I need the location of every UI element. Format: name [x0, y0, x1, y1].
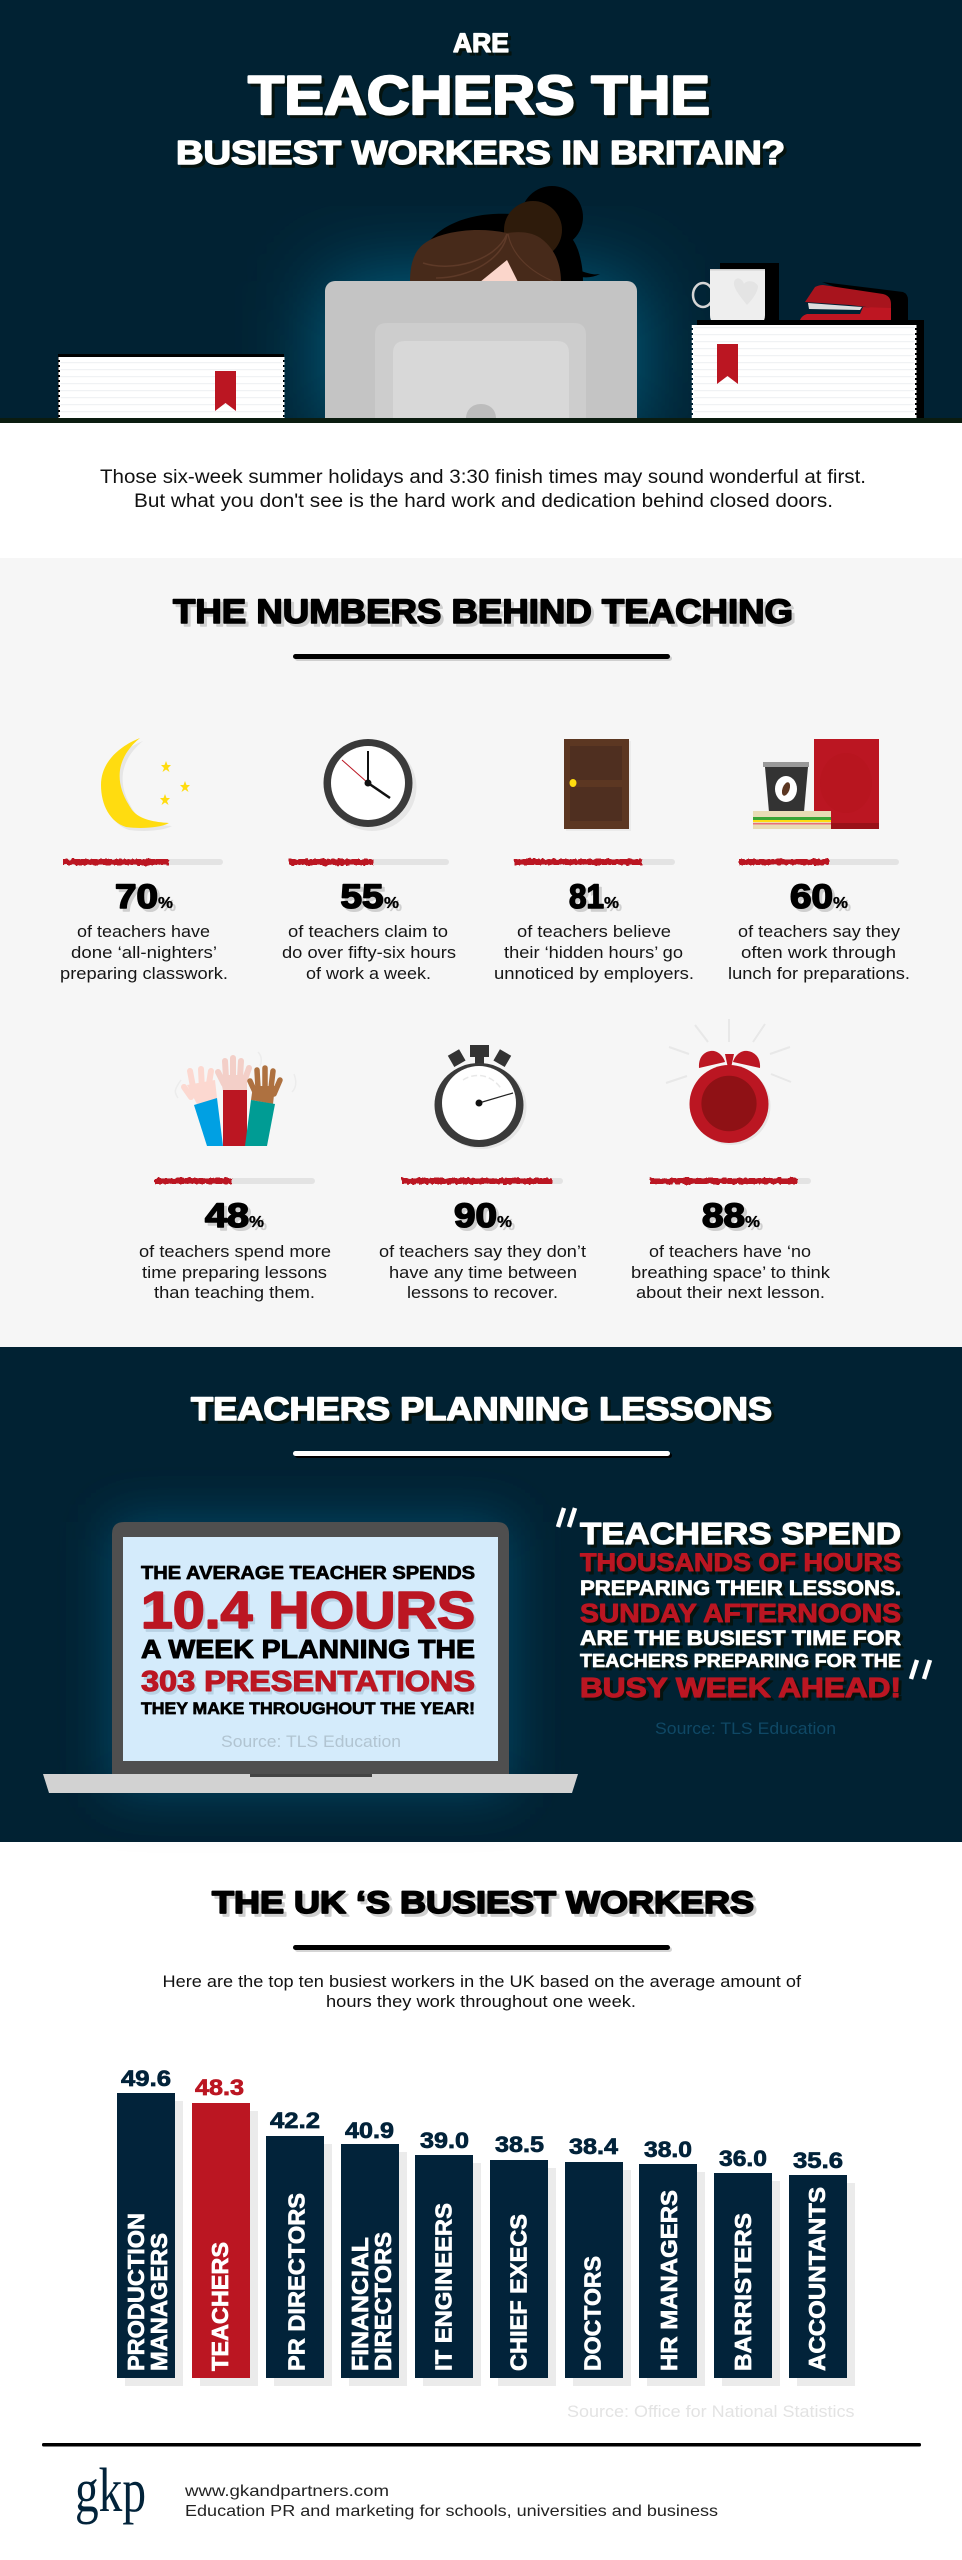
stat: 60% lunch: %	[833, 895, 848, 912]
chart intro text	[162, 1972, 801, 2011]
heading: planning: TEACHERS PLANNING LESSONS	[191, 1391, 772, 1427]
stat: 90% no recovery time: lessons to recover.	[407, 1283, 558, 1302]
bar: barristers	[714, 2146, 780, 2386]
bar: accountants	[789, 2148, 855, 2386]
quote: THOUSANDS OF HOURS	[580, 1549, 901, 1577]
quote: ARE THE BUSIEST TIME FOR	[580, 1627, 901, 1650]
bar chart	[117, 2066, 855, 2386]
chart source: Source: Office for National Statistics	[567, 2402, 854, 2421]
title	[176, 28, 785, 171]
bar: accountants: ACCOUNTANTS	[804, 2187, 830, 2371]
bar: financial directors: 40.9	[345, 2118, 394, 2143]
bar: teachers: 48.3	[195, 2075, 244, 2100]
stat: 55% fifty-six hours: %	[384, 895, 399, 912]
logo: gkp	[75, 2457, 146, 2525]
intro text: But what you don't see is the hard work and dedication behind closed doors.	[134, 491, 833, 512]
stat: 88% no breathing space: about their next lesson.	[636, 1283, 825, 1302]
bar: barristers: BARRISTERS	[730, 2213, 756, 2371]
stat: 48% preparing lessons: of teachers spend more	[139, 1242, 331, 1261]
heading: the UK's busiest workers: THE UK ‘S BUSIEST WORKERS	[212, 1884, 754, 1920]
footer text	[184, 2483, 718, 2520]
bar: IT engineers	[415, 2128, 481, 2386]
bar: PR directors	[266, 2108, 332, 2386]
stat: 90% no recovery time: %	[497, 1214, 512, 1231]
bar: IT engineers: 39.0	[420, 2128, 469, 2153]
stat: 81% hidden hours: %	[604, 895, 619, 912]
icon: closing quote mark	[911, 1660, 930, 1679]
stat: 81% hidden hours: unnoticed by employers.	[494, 964, 694, 983]
bar: financial directors	[341, 2118, 407, 2386]
footer text: www.gkandpartners.com	[184, 2483, 389, 2500]
chart intro text: Here are the top ten busiest workers in the UK based on the average amount of	[162, 1972, 801, 1991]
panel: teachers planning lessons	[0, 1347, 962, 1842]
stat: 55% fifty-six hours: do over fifty-six hours	[282, 943, 456, 962]
bar: financial directors: FINANCIAL	[347, 2237, 373, 2371]
bar: barristers: 36.0	[719, 2146, 767, 2171]
quote	[558, 1508, 930, 1703]
laptop	[43, 1522, 578, 1793]
stat: 70% all-nighters: 70	[115, 878, 158, 916]
laptop screen text: 303 PRESENTATIONS	[141, 1666, 475, 1698]
stat: 48% preparing lessons: time preparing lessons	[142, 1263, 327, 1282]
icon: ringing alarm clock	[666, 1019, 791, 1145]
bar: doctors	[565, 2134, 631, 2386]
stat: 90% no recovery time: of teachers say they don’t	[379, 1242, 586, 1261]
stat: 90% no recovery time: 90	[454, 1197, 497, 1235]
stat: 88% no breathing space: %	[745, 1214, 760, 1231]
bar: doctors: 38.4	[569, 2134, 619, 2159]
bar: PR directors: PR DIRECTORS	[284, 2193, 310, 2371]
quote: SUNDAY AFTERNOONS	[580, 1598, 901, 1628]
stat: 88% no breathing space: of teachers have ‘no	[649, 1242, 811, 1261]
laptop screen text: A WEEK PLANNING THE	[141, 1636, 475, 1664]
icon: right paper stack	[693, 320, 924, 418]
stat: 70% all-nighters: of teachers have	[77, 922, 210, 941]
bar: HR managers	[639, 2137, 705, 2386]
laptop screen text	[141, 1563, 475, 1751]
bar: accountants: 35.6	[793, 2148, 843, 2173]
stat: 70% all-nighters	[60, 738, 228, 983]
bar: teachers	[192, 2075, 258, 2386]
stat: 81% hidden hours: of teachers believe	[517, 922, 671, 941]
quote: TEACHERS SPEND	[580, 1517, 901, 1551]
heading: numbers: THE NUMBERS BEHIND TEACHING	[173, 593, 793, 631]
bar: IT engineers: IT ENGINEERS	[430, 2203, 456, 2371]
bar: doctors: DOCTORS	[579, 2256, 605, 2371]
bar: teachers: TEACHERS	[207, 2242, 233, 2371]
stat: 70% all-nighters: preparing classwork.	[60, 964, 228, 983]
title: ARE	[453, 28, 509, 58]
bar: production managers: 49.6	[121, 2066, 171, 2091]
footer text: Education PR and marketing for schools, universities and business	[185, 2503, 718, 2520]
stat: 88% no breathing space: 88	[702, 1197, 745, 1235]
stat: 55% fifty-six hours	[282, 739, 456, 983]
stat: 60% lunch: 60	[790, 878, 833, 916]
icon: monitor back	[325, 281, 637, 419]
bar: production managers: MANAGERS	[146, 2233, 172, 2371]
title: TEACHERS THE	[248, 64, 710, 126]
stat: 48% preparing lessons: than teaching them.	[154, 1283, 315, 1302]
stat: 60% lunch: lunch for preparations.	[728, 964, 910, 983]
quote: PREPARING THEIR LESSONS.	[580, 1577, 901, 1600]
stat: 81% hidden hours: their ‘hidden hours’ go	[504, 943, 683, 962]
icon: left bookmark	[215, 371, 236, 411]
panel: header illustration	[0, 0, 962, 431]
laptop screen text: THE AVERAGE TEACHER SPENDS	[141, 1563, 475, 1583]
icon: stapler	[799, 282, 908, 325]
bar: chief execs: CHIEF EXECS	[505, 2214, 531, 2371]
icon: mug	[693, 263, 779, 325]
bar: HR managers: HR MANAGERS	[656, 2190, 682, 2371]
stat: 90% no recovery time: have any time between	[389, 1263, 577, 1282]
icon: teacher hair behind monitor	[410, 186, 600, 282]
laptop screen text: 10.4 HOURS	[141, 1582, 475, 1640]
stat: 55% fifty-six hours: of work a week.	[306, 964, 431, 983]
stat: 81% hidden hours: 81	[569, 878, 604, 916]
stat: 60% lunch: often work through	[741, 943, 896, 962]
stat: 88% no breathing space	[631, 1019, 831, 1302]
stat: 55% fifty-six hours: of teachers claim to	[288, 922, 448, 941]
bar: HR managers: 38.0	[644, 2137, 692, 2162]
stat: 48% preparing lessons: %	[249, 1214, 264, 1231]
quote: TEACHERS PREPARING FOR THE	[580, 1651, 901, 1671]
title: BUSIEST WORKERS IN BRITAIN?	[176, 134, 785, 171]
icon: opening quote mark	[558, 1508, 575, 1527]
icon: lunch bag, coffee and sandwich	[753, 739, 879, 829]
icon: right bookmark	[717, 344, 738, 384]
chart intro text: hours they work throughout one week.	[326, 1992, 636, 2011]
stat: 81% hidden hours	[494, 739, 694, 983]
icon: stopwatch	[434, 1045, 526, 1149]
stat: 70% all-nighters: done ‘all-nighters’	[71, 943, 217, 962]
bar: production managers	[117, 2066, 183, 2386]
bar: PR directors: 42.2	[270, 2108, 320, 2133]
laptop screen text: Source: TLS Education	[221, 1732, 401, 1751]
bar: chief execs	[490, 2132, 556, 2386]
quote: BUSY WEEK AHEAD!	[580, 1672, 901, 1703]
icon: wall clock	[324, 739, 416, 831]
footer	[42, 2443, 921, 2525]
quote source: Source: TLS Education	[655, 1719, 836, 1738]
icon: door	[564, 739, 631, 831]
bar: chief execs: 38.5	[495, 2132, 544, 2157]
stat: 55% fifty-six hours: 55	[340, 878, 384, 916]
intro text: Those six-week summer holidays and 3:30 finish times may sound wonderful at first.	[100, 467, 866, 488]
icon: moon and stars	[101, 738, 190, 831]
stat: 48% preparing lessons: 48	[205, 1197, 249, 1235]
stat: 90% no recovery time	[379, 1045, 586, 1302]
stat: 60% lunch	[728, 739, 910, 983]
stat: 48% preparing lessons	[139, 1052, 331, 1302]
icon: left paper stack	[58, 354, 284, 418]
stat: 70% all-nighters: %	[158, 895, 173, 912]
icon: raised hands	[175, 1052, 296, 1146]
bar: financial directors: DIRECTORS	[370, 2232, 396, 2371]
laptop screen text: THEY MAKE THROUGHOUT THE YEAR!	[141, 1699, 475, 1718]
stat: 60% lunch: of teachers say they	[738, 922, 901, 941]
intro text	[100, 467, 866, 512]
stat: 88% no breathing space: breathing space’ to think	[631, 1263, 831, 1282]
bar: production managers: PRODUCTION	[123, 2213, 149, 2371]
panel: the numbers behind teaching	[0, 558, 962, 1347]
